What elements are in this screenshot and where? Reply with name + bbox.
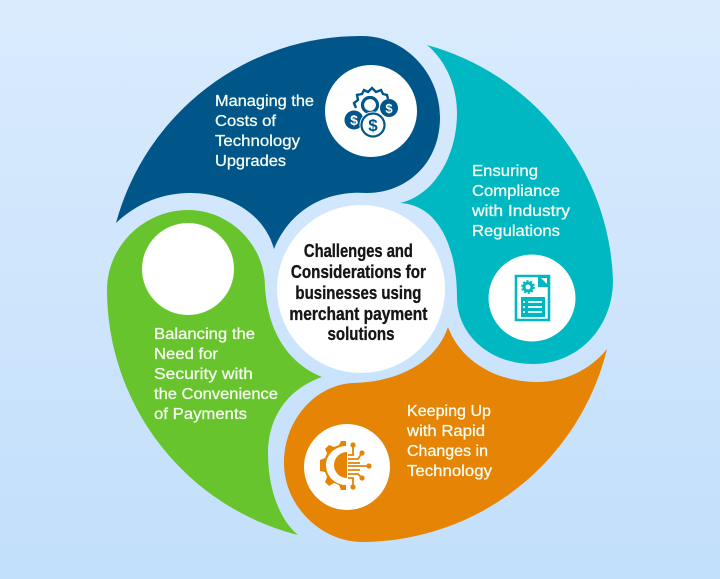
icon: gear and coins: $ xyxy=(350,112,358,128)
text: keeping up: with Rapid xyxy=(406,423,485,440)
panel: keeping up with technology xyxy=(284,327,607,542)
text: managing costs: Upgrades xyxy=(215,153,286,170)
text: keeping up: Keeping Up xyxy=(407,403,491,420)
title: businesses using xyxy=(295,282,421,303)
text: balancing security: Balancing the xyxy=(154,326,255,343)
icon: gear and coins: $ xyxy=(368,116,378,135)
text: ensuring compliance: Compliance xyxy=(472,183,560,200)
title: solutions xyxy=(328,323,394,344)
text: managing costs: Managing the xyxy=(215,93,314,110)
text: managing costs: Costs of xyxy=(215,113,277,130)
text: balancing security: of Payments xyxy=(154,406,247,423)
icon: blank white circle xyxy=(142,223,234,315)
text: ensuring compliance: with Industry xyxy=(471,203,570,220)
title: Considerations for xyxy=(291,261,426,282)
title: Challenges and xyxy=(304,240,413,261)
text: ensuring compliance: Regulations xyxy=(472,223,560,240)
panel: center title circle xyxy=(277,205,445,373)
text: balancing security: Security with xyxy=(154,366,253,383)
icon: gear and coins xyxy=(325,65,417,157)
icon: gear and coins: $ xyxy=(385,101,393,116)
text: keeping up: Technology xyxy=(407,463,492,480)
icon: gear and circuit xyxy=(304,424,390,510)
panel: balancing security and convenience xyxy=(107,210,322,535)
text: ensuring compliance: Ensuring xyxy=(472,163,538,180)
text: managing costs: Technology xyxy=(215,133,300,150)
title: merchant payment xyxy=(289,303,427,324)
icon: compliance document xyxy=(488,254,576,342)
text: balancing security: the Convenience xyxy=(154,386,278,403)
text: balancing security: Need for xyxy=(154,346,219,363)
text: keeping up: Changes in xyxy=(407,443,488,460)
panel: ensuring compliance xyxy=(400,45,613,364)
panel: managing technology costs xyxy=(116,36,440,249)
